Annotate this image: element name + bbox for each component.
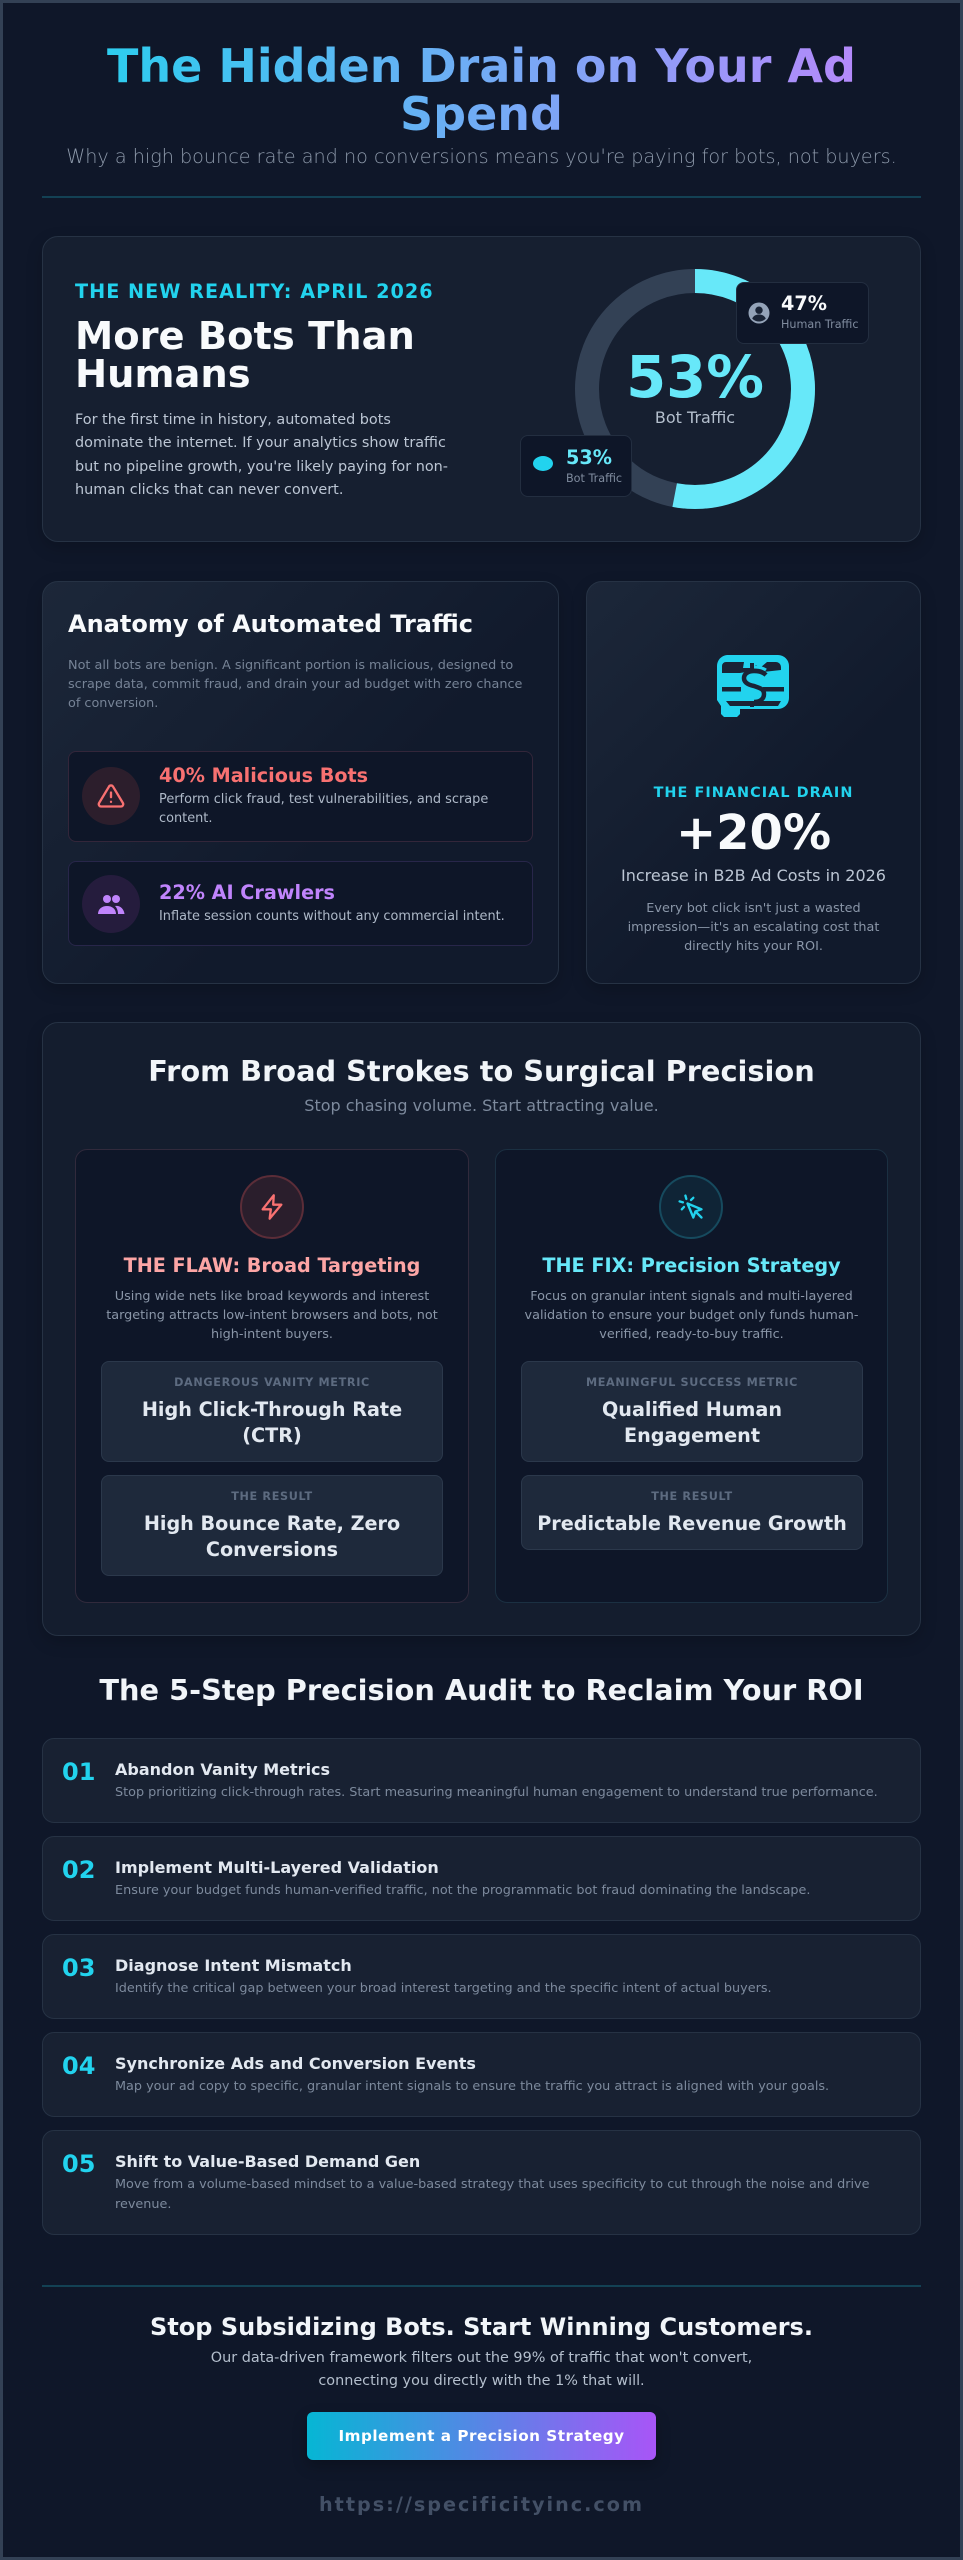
anatomy text: of conversion. <box>68 696 158 711</box>
success value: Engagement <box>624 1424 760 1447</box>
flaw result value: High Bounce Rate, Zero <box>144 1512 400 1535</box>
comparison subtitle: Stop chasing volume. Start attracting value. <box>304 1096 659 1115</box>
hero eyebrow: THE NEW REALITY: APRIL 2026 <box>75 280 434 303</box>
step number: 01 <box>62 1758 95 1786</box>
card: the fix <box>495 1149 888 1603</box>
flaw text <box>106 1289 438 1342</box>
footer heading: Stop Subsidizing Bots. Start Winning Customers. <box>150 2313 813 2341</box>
flaw text: high-intent buyers. <box>211 1327 333 1342</box>
callout: bot traffic <box>520 435 632 497</box>
human label: Human Traffic <box>781 318 859 331</box>
crawlers title: 22% AI Crawlers <box>159 881 335 904</box>
hero heading: More Bots Than <box>75 314 415 359</box>
step number: 02 <box>62 1856 95 1884</box>
anatomy text: Not all bots are benign. A significant portion is malicious, designed to <box>68 658 513 673</box>
drain label: THE FINANCIAL DRAIN <box>654 785 853 801</box>
callout: human traffic <box>736 282 869 344</box>
card: AI crawlers <box>68 861 533 946</box>
step number: 03 <box>62 1954 95 1982</box>
step title: Abandon Vanity Metrics <box>115 1760 330 1779</box>
hero heading: Humans <box>75 352 251 397</box>
icon: click <box>659 1175 723 1239</box>
step title: Diagnose Intent Mismatch <box>115 1956 352 1975</box>
title <box>42 42 921 138</box>
step number: 05 <box>62 2150 95 2178</box>
malicious text: content. <box>159 811 212 826</box>
step text <box>115 2177 869 2212</box>
metric: vanity <box>101 1361 443 1462</box>
step title: Synchronize Ads and Conversion Events <box>115 2054 476 2073</box>
fix text: validation to ensure your budget only funds human- <box>525 1308 858 1323</box>
icon: human <box>748 302 770 324</box>
step title: Shift to Value-Based Demand Gen <box>115 2152 420 2171</box>
donut label: Bot Traffic <box>655 408 735 427</box>
step number: 04 <box>62 2052 95 2080</box>
crawlers text: Inflate session counts without any commercial intent. <box>159 909 505 924</box>
success value <box>602 1398 782 1447</box>
step 2 <box>42 1836 921 1921</box>
card: the flaw <box>75 1149 469 1603</box>
flaw result value <box>144 1512 400 1561</box>
vanity value: High Click-Through Rate <box>142 1398 402 1421</box>
icon: bot dot <box>533 456 553 471</box>
fix text: Focus on granular intent signals and multi-layered <box>530 1289 853 1304</box>
drain text: impression—it's an escalating cost that <box>628 920 879 935</box>
hero text: For the first time in history, automated bots <box>75 412 391 428</box>
success label: MEANINGFUL SUCCESS METRIC <box>586 1376 798 1389</box>
anatomy text: scrape data, commit fraud, and drain your ad budget with zero chance <box>68 677 522 692</box>
donut value: 53% <box>626 344 764 411</box>
footer text: connecting you directly with the 1% that will. <box>318 2373 645 2389</box>
comparison heading: From Broad Strokes to Surgical Precision <box>148 1054 815 1088</box>
metric: flaw result <box>101 1475 443 1576</box>
drain text <box>628 901 880 954</box>
subtitle: Why a high bounce rate and no conversions means you're paying for bots, not buyers. <box>66 145 897 168</box>
footer text <box>211 2350 752 2389</box>
hero text: human clicks that can never convert. <box>75 482 343 498</box>
audit heading: The 5-Step Precision Audit to Reclaim Your ROI <box>99 1673 864 1707</box>
malicious text: Perform click fraud, test vulnerabilities, and scrape <box>159 792 488 807</box>
bot value: 53% <box>566 446 612 469</box>
success value: Qualified Human <box>602 1398 782 1421</box>
step 5 <box>42 2130 921 2235</box>
drain value: +20% <box>676 805 831 861</box>
step text: Identify the critical gap between your broad interest targeting and the specific intent of actual buyers. <box>115 1981 772 1996</box>
metric: success <box>521 1361 863 1462</box>
hero heading <box>75 314 415 397</box>
drain caption: Increase in B2B Ad Costs in 2026 <box>621 866 886 885</box>
hero text: dominate the internet. If your analytics show traffic <box>75 435 446 451</box>
icon: lightning <box>240 1175 304 1239</box>
step text: Stop prioritizing click-through rates. Start measuring meaningful human engagement to understand true performance. <box>115 1785 878 1800</box>
icon: money <box>717 655 789 717</box>
malicious text <box>159 792 488 826</box>
vanity label: DANGEROUS VANITY METRIC <box>174 1376 370 1389</box>
fix result label: THE RESULT <box>651 1490 733 1503</box>
step 3 <box>42 1934 921 2019</box>
malicious title: 40% Malicious Bots <box>159 764 368 787</box>
icon: users <box>82 875 140 933</box>
fix text: verified, ready-to-buy traffic. <box>599 1327 784 1342</box>
button <box>307 2412 656 2460</box>
flaw result value: Conversions <box>206 1538 338 1561</box>
donut chart <box>575 269 815 509</box>
anatomy text <box>68 658 522 711</box>
url: https://specificityinc.com <box>319 2493 644 2516</box>
title: The Hidden Drain on Your Ad <box>107 39 856 93</box>
panel: anatomy <box>42 581 559 984</box>
step 4 <box>42 2032 921 2117</box>
drain text: Every bot click isn't just a wasted <box>646 901 861 916</box>
metric: fix result <box>521 1475 863 1550</box>
flaw result label: THE RESULT <box>231 1490 313 1503</box>
flaw text: Using wide nets like broad keywords and interest <box>115 1289 429 1304</box>
footer text: Our data-driven framework filters out the 99% of traffic that won't convert, <box>211 2350 752 2366</box>
button: Implement a Precision Strategy <box>338 2427 625 2445</box>
step 1 <box>42 1738 921 1823</box>
step text: Move from a volume-based mindset to a value-based strategy that uses specificity to cut through the noise and drive <box>115 2177 869 2192</box>
hero text: but no pipeline growth, you're likely paying for non- <box>75 459 448 475</box>
panel: precision comparison <box>42 1022 921 1636</box>
step text: Ensure your budget funds human-verified traffic, not the programmatic bot fraud dominating the landscape. <box>115 1883 810 1898</box>
flaw title: THE FLAW: Broad Targeting <box>124 1254 420 1277</box>
icon: warning <box>82 767 140 825</box>
fix title: THE FIX: Precision Strategy <box>542 1254 841 1277</box>
step text: Map your ad copy to specific, granular intent signals to ensure the traffic you attract is aligned with your goals. <box>115 2079 829 2094</box>
fix result value: Predictable Revenue Growth <box>537 1512 847 1535</box>
card: malicious bots <box>68 751 533 842</box>
bot label: Bot Traffic <box>566 472 622 485</box>
fix text <box>524 1289 858 1342</box>
hero text <box>75 412 448 498</box>
title: Spend <box>400 87 563 141</box>
anatomy heading: Anatomy of Automated Traffic <box>68 610 473 638</box>
step title: Implement Multi-Layered Validation <box>115 1858 439 1877</box>
flaw text: targeting attracts low-intent browsers and bots, not <box>106 1308 438 1323</box>
panel: financial drain <box>586 581 921 984</box>
vanity value: (CTR) <box>242 1424 302 1447</box>
step text: revenue. <box>115 2196 171 2212</box>
drain text: directly hits your ROI. <box>684 939 823 954</box>
human value: 47% <box>781 292 827 315</box>
panel: hero <box>42 236 921 542</box>
vanity value <box>142 1398 402 1447</box>
